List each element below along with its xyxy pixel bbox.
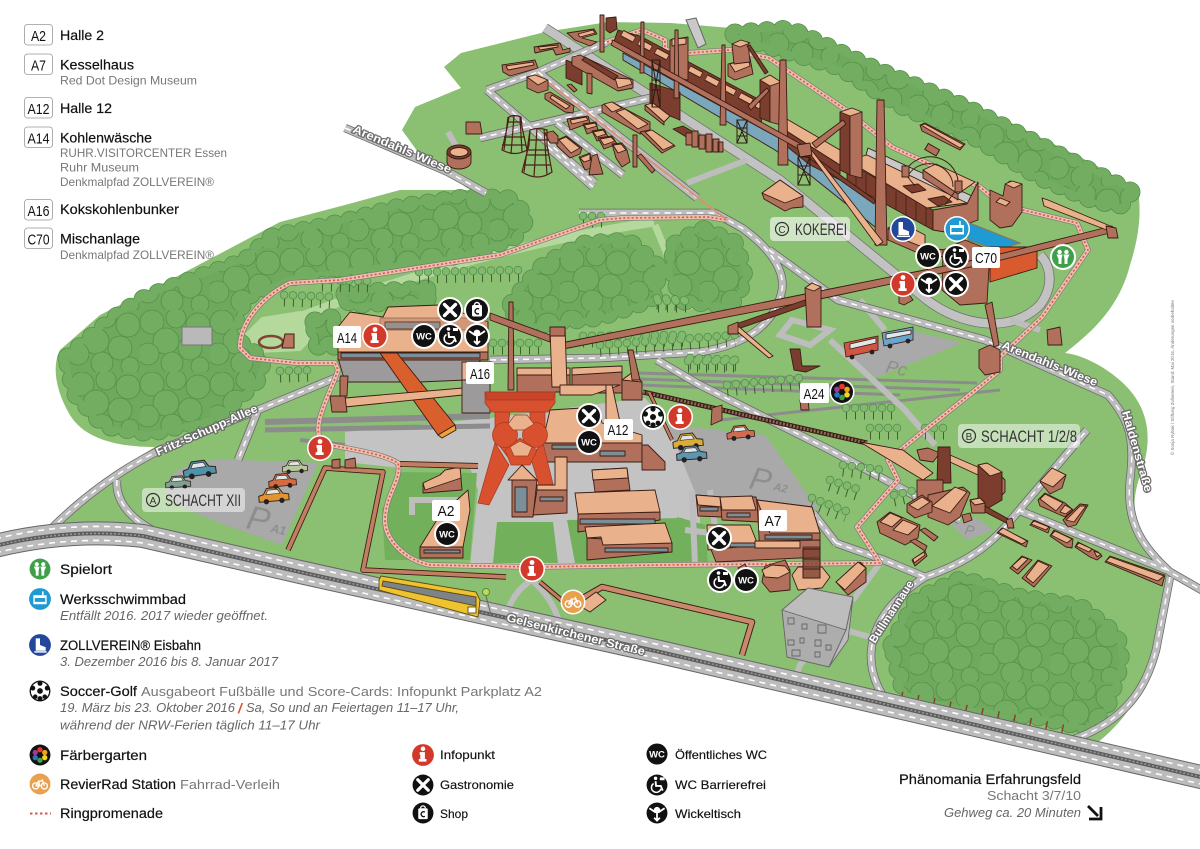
accessible WC markers (437, 244, 969, 593)
legend: building list: A12 (28, 101, 50, 118)
small blocks (502, 29, 597, 76)
ferris wheel (902, 143, 962, 205)
gate and small structures (332, 405, 722, 612)
legend: services column 2: Öffentliches WC (675, 748, 767, 762)
legend: attractions: Werksschwimmbad (60, 592, 186, 607)
building tags: A16 (470, 366, 490, 383)
WC markers: WC (439, 530, 455, 540)
legend: building list: Denkmalpfad ZOLLVEREIN® (60, 175, 214, 189)
legend: services column 2 (645, 744, 767, 825)
central buildings behind headframe (420, 302, 672, 560)
battery body west (613, 30, 762, 128)
legend: attractions: Soccer-Golf (60, 684, 137, 699)
roads (50, 42, 1200, 745)
parked cars (165, 424, 755, 505)
road names: Arendahls Wiese (351, 124, 453, 176)
cylinder group (673, 126, 723, 152)
callout: Phaenomania: Gehweg ca. 20 Minuten (944, 806, 1081, 820)
legend: attractions: RevierRad Station (60, 777, 176, 792)
legend: building list: Mischanlage (60, 232, 140, 246)
legend: building list: Ruhr Museum (60, 160, 139, 174)
district label: Schacht XII (142, 488, 245, 512)
Schacht XII: A14 Kohlenwaesche (330, 305, 492, 438)
ground buildings (466, 122, 482, 134)
legend: attractions (28, 557, 542, 821)
towers (840, 110, 850, 175)
tank building (728, 58, 753, 80)
WC markers: WC (738, 576, 754, 586)
Schacht 1/2/8 complex (860, 442, 1165, 587)
legend: services column 1: Infopunkt (440, 748, 496, 762)
parking marks: P (747, 460, 776, 499)
legend: services column 1: Gastronomie (440, 778, 514, 792)
parking C (842, 330, 962, 377)
legend: attractions: während der NRW-Ferien täglich 11–17 Uhr (60, 718, 321, 732)
legend: building list: RUHR.VISITORCENTER Essen (60, 146, 227, 160)
legend: services column 2: Wickeltisch (675, 807, 741, 821)
WC markers (411, 243, 941, 593)
legend: attractions: Färbergarten (60, 748, 147, 763)
tram stop (482, 588, 491, 615)
light green clearings (245, 222, 690, 352)
district label: Kokerei: KOKEREI (795, 220, 847, 239)
legend: building list: A14 (28, 130, 50, 148)
blocks near Kokerei label (762, 180, 803, 211)
district label: Kokerei (770, 217, 850, 241)
legend: attractions: Spielort (60, 562, 112, 577)
Ringpromenade path (240, 30, 1088, 567)
Mischanlage C70 (899, 240, 1037, 305)
gray strip (866, 148, 972, 205)
forest trunks (901, 697, 1063, 730)
legend: attractions: / (237, 700, 244, 716)
scaffold towers (652, 60, 810, 185)
Kokerei area: west buildings (447, 15, 965, 211)
legend: building list: Kesselhaus (60, 58, 134, 72)
ring earthwork and gray blocks (182, 327, 294, 348)
building tags: A2 (438, 503, 454, 520)
shop marker (464, 297, 490, 323)
paved plaza (345, 398, 700, 568)
A7 Kesselhaus complex (696, 495, 866, 595)
lawns (382, 472, 708, 565)
legend: building list: Halle 12 (60, 101, 112, 116)
parking marks (243, 356, 976, 541)
tram tracks (265, 373, 1000, 445)
WC markers: WC (581, 438, 597, 448)
legend: services column 2: WC Barrierefrei (675, 778, 766, 792)
headframe (478, 392, 555, 505)
long conveyor belts (556, 198, 1118, 410)
road names: Bullmannaue (867, 579, 917, 646)
gastronomy markers (437, 271, 969, 551)
ovens block (847, 162, 933, 230)
parking Schacht (950, 517, 993, 540)
belts (611, 40, 808, 153)
battery body middle (785, 130, 840, 180)
legend: services column 2: WC (649, 750, 665, 760)
parking A2 (668, 425, 820, 510)
tower lattice at A7 (803, 549, 820, 578)
building tags: A7 (764, 513, 782, 530)
legend: attractions: Sa, So und an Feiertagen 11–17 Uhr, (246, 701, 459, 715)
legend: building list (24, 24, 227, 262)
legend: building list: A7 (31, 58, 46, 74)
parking marks: A2 (771, 481, 789, 496)
district label: Schacht 1/2/8: SCHACHT 1/2/8 (981, 427, 1077, 446)
legend: building list: Kokskohlenbunker (60, 202, 180, 217)
legend: attractions: ZOLLVEREIN® Eisbahn (60, 638, 201, 653)
tram (379, 576, 480, 617)
callout: Phaenomania (899, 772, 1081, 820)
road names: Haldenstraße (1119, 410, 1154, 494)
legend: attractions: Ausgabeort Fußbälle und Score-Cards: Infopunkt Parkplatz A2 (141, 684, 542, 699)
legend: attractions: 19. März bis 23. Oktober 2016 (60, 701, 235, 715)
legend: building list: Kohlenwäsche (60, 130, 152, 146)
box buildings (527, 55, 675, 175)
parking marks: Pc (884, 356, 909, 380)
legend: services column 1 (411, 743, 514, 825)
callout: Phaenomania: Phänomania Erfahrungsfeld (899, 772, 1081, 787)
district label: Schacht 1/2/8: B (966, 432, 973, 443)
right tower (990, 181, 1022, 228)
legend: building list: Denkmalpfad ZOLLVEREIN® (60, 248, 214, 262)
forests (68, 30, 1130, 726)
district label: Schacht XII: SCHACHT XII (165, 491, 241, 510)
parking marks: P (243, 499, 274, 541)
cooling tower lattices (502, 116, 552, 177)
building in front of headframe (508, 457, 567, 517)
Sanaa cube (782, 588, 853, 667)
other markers (560, 216, 1076, 614)
conveyor frame south-west and south (288, 392, 867, 655)
road names: Fritz-Schupp-Allee (154, 403, 260, 459)
road names: Gelsenkirchener Straße (505, 612, 646, 658)
quench water band (623, 53, 887, 240)
block under Eisbahn icon (888, 228, 947, 257)
road names (154, 124, 1154, 658)
poles top (600, 15, 617, 52)
district label: Schacht 1/2/8 (958, 424, 1080, 448)
small trees (280, 216, 946, 516)
WC markers: WC (416, 332, 432, 342)
building tags (333, 247, 1000, 531)
district label: Schacht XII: A (150, 496, 157, 507)
building tags: C70 (975, 250, 997, 267)
legend: attractions: 3. Dezember 2016 bis 8. Januar 2017 (60, 655, 279, 669)
arrow: direction southeast (1088, 806, 1101, 819)
road names: Arendahls-Wiese (1000, 340, 1099, 389)
legend: building list: A2 (31, 28, 46, 45)
copyright note: © Sonja Rybak / Stiftung Zollverein, Stand: Mai 2016, Änderungen vorbehalten (1169, 300, 1175, 455)
parking A1 (165, 460, 318, 545)
wide factory road surface (545, 28, 1049, 324)
parking marks: A1 (268, 521, 288, 538)
buses (844, 327, 913, 359)
ramp (686, 18, 706, 48)
building tags: A24 (804, 386, 824, 403)
legend: building list: Red Dot Design Museum (60, 74, 197, 88)
Gelsenkirchener road and rail (0, 526, 1200, 785)
legend: building list: C70 (28, 232, 50, 248)
legend: building list: Halle 2 (60, 28, 104, 43)
legend: attractions: Fahrrad-Verleih (180, 777, 280, 792)
legend: attractions: Ringpromenade (60, 806, 163, 821)
gray access paths (412, 132, 1040, 680)
district label: Kokerei: C (778, 225, 786, 236)
building tags: A12 (608, 422, 628, 439)
gas tank (447, 145, 471, 169)
swimming pool (967, 222, 1020, 250)
legend: attractions: Entfällt 2016. 2017 wieder geöffnet. (60, 609, 268, 623)
coke battery (611, 22, 1022, 257)
legend: services column 1: Shop (440, 807, 468, 821)
WC markers: WC (920, 252, 936, 262)
chimneys (875, 100, 887, 245)
baby changing markers (464, 271, 942, 349)
building tags: A14 (337, 330, 357, 347)
wide factory road (545, 28, 1049, 324)
legend: building list: A16 (28, 203, 50, 220)
callout: Phaenomania: Schacht 3/7/10 (987, 788, 1081, 803)
info markers (307, 271, 916, 582)
parking marks: P (963, 521, 976, 539)
